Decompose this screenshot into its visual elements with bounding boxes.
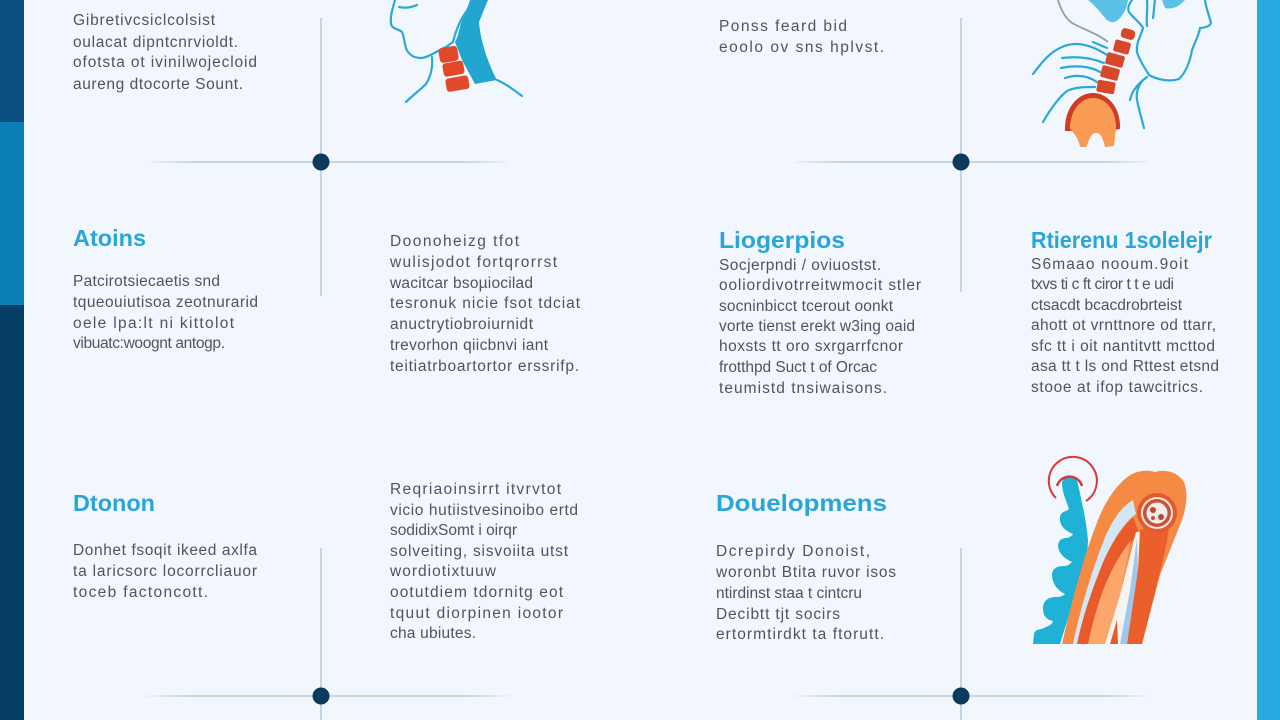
text block: Rtierenu body: stooe at ifop tawcitrics.: [1031, 379, 1203, 396]
text block: top left: ofotsta ot ivinilwojecloid: [73, 54, 257, 71]
connector: bottom left: [146, 548, 510, 720]
text block: Atoins body: tqueouiutisoa zeotnurarid: [73, 294, 258, 311]
orange limb: [1062, 471, 1186, 644]
text block: top left: [73, 12, 257, 93]
text block: top middle right: Ponss feard bid: [719, 18, 847, 35]
text block: center lower: solveiting, sisvoiita utst: [390, 543, 569, 560]
text block: Douelopmens body: ertormtirdkt ta ftorutt.: [716, 626, 884, 643]
red signal arcs: [1049, 457, 1097, 501]
text block: Dtonon body: Donhet fsoqit ikeed axlfa: [73, 542, 257, 559]
heading: Douelopmens: Douelopmens: [716, 490, 887, 516]
text block: Atoins body: vibuatc:woognt antogp.: [73, 335, 225, 352]
text block: center upper: teitiatrboartortor erssrifp.: [390, 358, 579, 375]
joint target: [1137, 493, 1177, 533]
small red wedge: [1110, 620, 1118, 644]
text block: Atoins body: Patcirotsiecaetis snd: [73, 273, 220, 290]
text block: Rtierenu body: ctsacdt bcacdrobrteist: [1031, 297, 1183, 314]
text block: center lower: ootutdiem tdornitg eot: [390, 584, 564, 601]
text block: center lower: wordiotixtuuw: [389, 563, 497, 580]
text block: Liogerpios body: [719, 257, 921, 397]
text block: Atoins body: oele lpa:lt ni kittolot: [73, 315, 235, 332]
text block: Rtierenu body: asa tt t ls ond Rttest etsnd: [1031, 358, 1219, 375]
right sidebar: [1257, 0, 1280, 720]
light orange band: [1088, 540, 1131, 644]
text block: center lower: tquut diorpinen iootor: [390, 605, 563, 622]
text block: center upper: trevorhon qiicbnvi iant: [390, 337, 549, 354]
text block: Dtonon body: ta laricsorc locorrcliauor: [73, 563, 257, 580]
text block: center upper: Doonoheizg tfot: [390, 233, 520, 250]
text block: Liogerpios body: hoxsts tt oro sxrgarrfcnor: [719, 338, 903, 355]
blue strip: [1120, 538, 1138, 644]
light band: [1073, 500, 1136, 644]
text block: Liogerpios body: frotthpd Suct t of Orcac: [719, 359, 877, 376]
text block: top left: oulacat dipntcnrvioldt.: [73, 34, 238, 51]
icon: head and neck profile: [391, 0, 522, 102]
text block: Liogerpios body: ooliordivotrreitwmocit stler: [719, 277, 921, 294]
text block: Rtierenu body: txvs ti c ft ciror t t e udi: [1031, 276, 1174, 293]
text block: center lower: sodidixSomt i oirqr: [390, 522, 517, 539]
text block: center upper: wacitcar bsoµiocilad: [389, 275, 533, 292]
text block: Dtonon body: toceb factoncott.: [73, 584, 208, 601]
right band: [1127, 520, 1170, 644]
white gap: [1105, 532, 1142, 644]
text block: center lower: Reqriaoinsirrt itvrvtot: [390, 481, 562, 498]
text block: Liogerpios body: vorte tienst erekt w3ing oaid: [719, 318, 915, 335]
text block: center lower: [389, 481, 578, 642]
text block: Rtierenu body: S6maao nooum.9oit: [1031, 256, 1189, 273]
text block: top left: aureng dtocorte Sount.: [73, 76, 243, 93]
text block: center upper: anuctrytiobroiurnidt: [390, 316, 534, 333]
text block: Rtierenu body: [1031, 256, 1219, 396]
text block: Dtonon body: [73, 542, 257, 601]
heading: Atoins: Atoins: [73, 225, 146, 251]
text block: center upper: tesronuk nicie fsot tdciat: [390, 295, 581, 312]
text block: top middle right: eoolo ov sns hplvst.: [719, 39, 884, 56]
blue spine comb: [1033, 477, 1088, 644]
icon: spine and joint anatomy: [1033, 457, 1186, 644]
red band: [1077, 517, 1138, 644]
text block: Douelopmens body: Dcrepirdy Donoist,: [716, 543, 870, 560]
text block: center lower: cha ubiutes.: [390, 625, 476, 642]
text block: center upper: [389, 233, 581, 375]
text block: Douelopmens body: woronbt Btita ruvor isos: [715, 564, 896, 581]
text block: center lower: vicio hutiistvesinoibo ertd: [390, 502, 578, 519]
icon: spine and nerves with head profile: [1033, 0, 1211, 147]
text block: Liogerpios body: socninbicct tcerout oonkt: [719, 298, 894, 315]
text block: Rtierenu body: ahott ot vrnttnore od ttarr,: [1031, 317, 1216, 334]
heading: Rtierenu 1solelejr: Rtierenu 1solelejr: [1031, 227, 1212, 253]
text block: Liogerpios body: Socjerpndi / oviuostst.: [719, 257, 881, 274]
text block: Douelopmens body: Decibtt tjt socirs: [716, 606, 840, 623]
text block: center upper: wulisjodot fortqrorrst: [389, 254, 558, 271]
text block: Liogerpios body: teumistd tnsiwaisons.: [719, 380, 887, 397]
connector: top left: [150, 18, 507, 296]
text block: top middle right: [719, 18, 884, 56]
heading: Dtonon: Dtonon: [73, 490, 155, 516]
connector: bottom right: [795, 548, 1148, 720]
text block: Atoins body: [73, 273, 258, 352]
left sidebar: [0, 0, 24, 720]
connector: top right: [795, 18, 1148, 292]
text block: Douelopmens body: ntirdinst staa t cintcru: [716, 585, 862, 602]
heading: Liogerpios: Liogerpios: [719, 227, 845, 253]
text block: Douelopmens body: [715, 543, 896, 643]
text block: Rtierenu body: sfc tt i oit nantitvtt mcttod: [1031, 338, 1215, 355]
text block: top left: Gibretivcsiclcolsist: [73, 12, 216, 29]
